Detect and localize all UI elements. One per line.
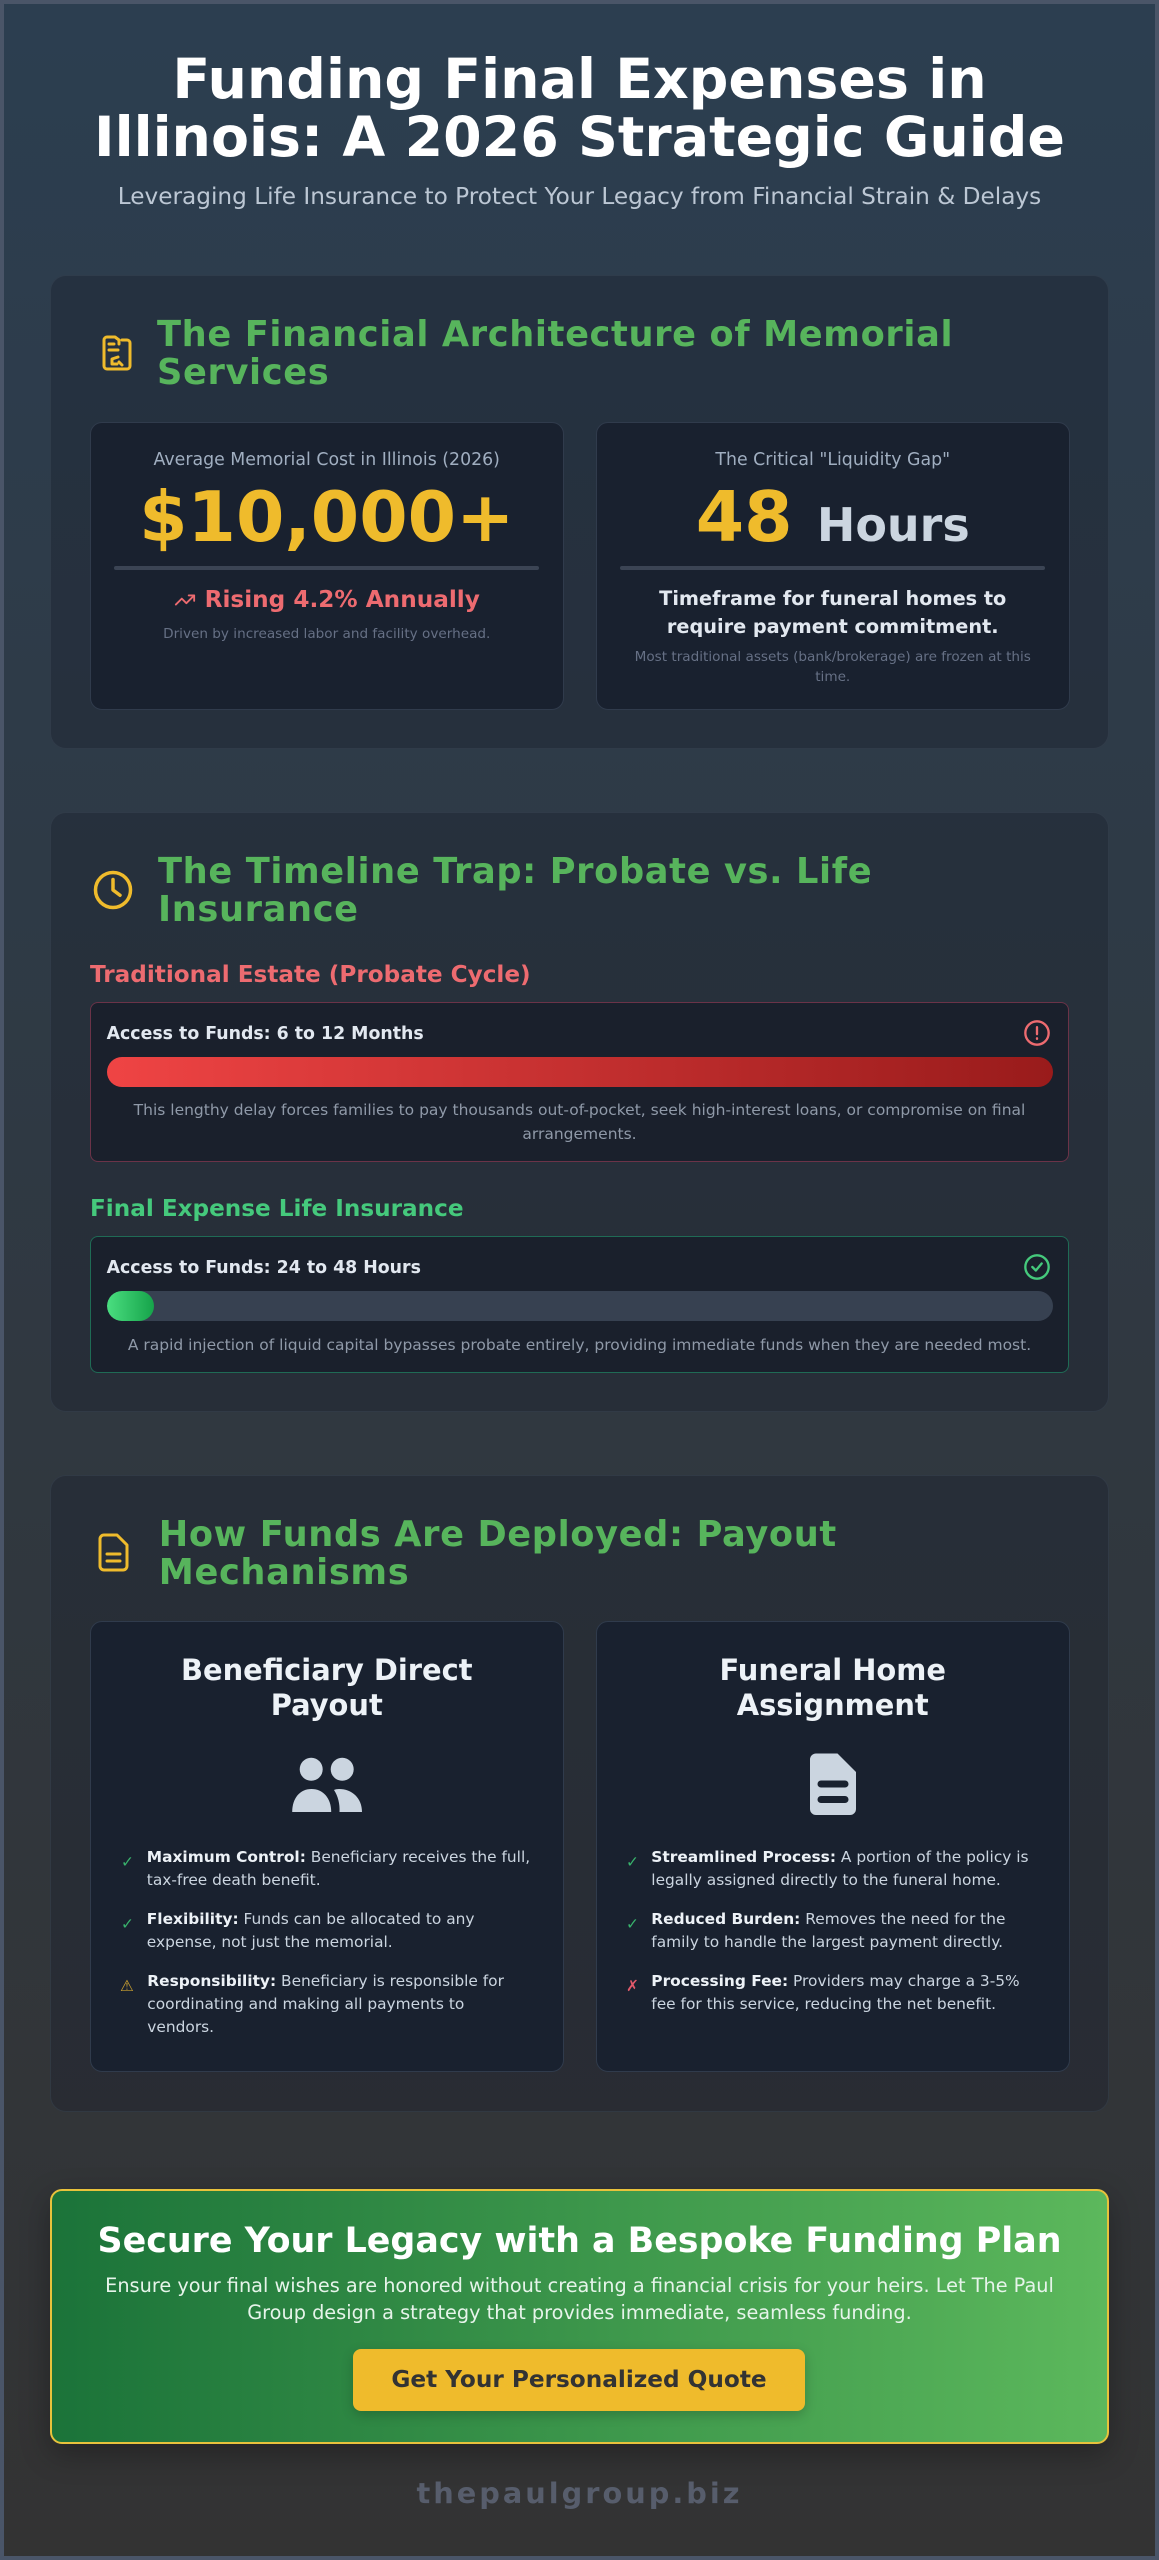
heading: payout mechanisms — [159, 1514, 837, 1593]
divider bar — [620, 566, 1045, 570]
text: Reduced Burden: Removes the need for the — [651, 1910, 1005, 1928]
text: Responsibility: Beneficiary is responsible for — [147, 1972, 504, 1990]
note: Most traditional assets (bank/brokerage) are frozen at this — [635, 649, 1031, 665]
item: maximum control — [121, 1848, 530, 1889]
value: hours: 48 Hours — [696, 477, 970, 558]
bar: full red — [107, 1057, 1053, 1087]
text: family to handle the largest payment directly. — [651, 1933, 1003, 1951]
icon: people — [292, 1758, 362, 1812]
title: Illinois: A 2026 Strategic Guide — [94, 106, 1065, 170]
description: This lengthy delay forces families to pay thousands out-of-pocket, seek high-interest loans, or compromise on final — [134, 1101, 1025, 1119]
stat card: liquidity gap — [596, 422, 1070, 710]
panel: financial architecture — [50, 275, 1109, 749]
label: The Critical "Liquidity Gap" — [715, 450, 950, 470]
cross mark: ✗ — [626, 1976, 639, 1994]
text: Maximum Control: Beneficiary receives the full, — [147, 1848, 530, 1866]
description — [134, 1101, 1025, 1143]
warning mark: ⚠ — [120, 1976, 134, 1994]
item: responsibility — [120, 1972, 504, 2036]
check mark: ✓ — [121, 1852, 134, 1870]
label: Average Memorial Cost in Illinois (2026) — [154, 450, 500, 470]
description: arrangements. — [522, 1125, 637, 1143]
button — [353, 2349, 805, 2411]
cta text: Ensure your final wishes are honored without creating a financial crisis for your heirs. Let The Paul — [105, 2274, 1054, 2297]
heading: financial architecture — [157, 314, 953, 393]
card title: Assignment — [737, 1688, 929, 1722]
title — [94, 48, 1065, 170]
text: vendors. — [147, 2018, 214, 2036]
text — [147, 1848, 530, 1889]
icon: clock — [94, 870, 132, 910]
trend: rising: Rising 4.2% Annually — [205, 586, 480, 613]
bar: short green — [107, 1291, 1053, 1321]
cta text — [105, 2274, 1054, 2324]
heading: financial architecture: The Financial Architecture of Memorial — [157, 314, 953, 355]
description — [659, 587, 1006, 638]
value: cost: $10,000+ — [139, 477, 514, 558]
text: fee for this service, reducing the net benefit. — [651, 1995, 996, 2013]
note — [635, 649, 1031, 685]
footer url: thepaulgroup.biz — [416, 2476, 743, 2510]
label: Access to Funds: 24 to 48 Hours — [107, 1258, 421, 1278]
heading: payout mechanisms: How Funds Are Deployed: Payout — [159, 1514, 837, 1554]
text: coordinating and making all payments to — [147, 1995, 464, 2013]
text: Processing Fee: Providers may charge a 3-5% — [651, 1972, 1020, 1990]
card title: Funeral Home — [720, 1653, 946, 1687]
item: processing fee — [626, 1972, 1020, 2013]
icon: check circle — [1024, 1254, 1050, 1280]
divider bar — [114, 566, 539, 570]
text — [651, 1910, 1005, 1951]
text — [651, 1848, 1029, 1889]
check mark: ✓ — [626, 1852, 639, 1870]
card title — [181, 1653, 473, 1722]
label: Access to Funds: 6 to 12 Months — [107, 1024, 424, 1044]
panel: call to action — [50, 2189, 1109, 2444]
panel: payout mechanisms — [50, 1475, 1109, 2112]
text: tax-free death benefit. — [147, 1871, 321, 1889]
item: streamlined process — [626, 1848, 1029, 1889]
text: Streamlined Process: A portion of the policy is — [651, 1848, 1029, 1866]
icon: document — [98, 1534, 128, 1572]
heading: timeline trap — [158, 850, 872, 930]
box: probate timeline — [90, 1002, 1069, 1162]
card title: Beneficiary Direct — [181, 1653, 473, 1687]
icon: document filled — [810, 1754, 856, 1815]
icon: alert — [1024, 1020, 1050, 1046]
card: beneficiary direct payout — [90, 1621, 564, 2072]
stat card: average cost — [90, 422, 564, 710]
button: Get Your Personalized Quote — [391, 2366, 767, 2393]
heading: timeline trap: The Timeline Trap: Probate vs. Life — [158, 850, 872, 892]
panel: timeline trap — [50, 812, 1109, 1412]
item: reduced burden — [626, 1910, 1005, 1951]
item: flexibility — [121, 1910, 474, 1951]
text: Flexibility: Funds can be allocated to any — [147, 1910, 474, 1928]
check mark: ✓ — [121, 1914, 134, 1932]
heading: financial architecture: Services — [157, 352, 329, 393]
text — [147, 1910, 474, 1951]
text — [147, 1972, 504, 2036]
subtitle: Leveraging Life Insurance to Protect Your Legacy from Financial Strain & Delays — [118, 183, 1041, 210]
title: Funding Final Expenses in — [172, 48, 987, 112]
check mark: ✓ — [626, 1914, 639, 1932]
note: Driven by increased labor and facility overhead. — [163, 626, 490, 642]
description: require payment commitment. — [667, 615, 999, 638]
box: insurance timeline — [90, 1236, 1069, 1373]
card title: Payout — [271, 1688, 383, 1722]
text — [651, 1972, 1020, 2013]
heading: timeline trap: Insurance — [158, 889, 359, 930]
description: A rapid injection of liquid capital bypasses probate entirely, providing immediate funds when they are needed most. — [128, 1336, 1031, 1354]
card title — [720, 1653, 946, 1722]
description: Timeframe for funeral homes to — [659, 587, 1006, 610]
cta heading: Secure Your Legacy with a Bespoke Funding Plan — [98, 2221, 1062, 2261]
text: legally assigned directly to the funeral home. — [651, 1871, 1001, 1889]
icon: clipboard with dollar — [102, 336, 132, 370]
card: funeral home assignment — [596, 1621, 1070, 2072]
cta text: Group design a strategy that provides immediate, seamless funding. — [247, 2301, 912, 2324]
subheading: traditional estate: Traditional Estate (Probate Cycle) — [90, 962, 531, 988]
text: expense, not just the memorial. — [147, 1933, 393, 1951]
note: time. — [815, 669, 850, 685]
heading: payout mechanisms: Mechanisms — [159, 1552, 409, 1593]
subheading: final expense: Final Expense Life Insurance — [90, 1196, 464, 1222]
